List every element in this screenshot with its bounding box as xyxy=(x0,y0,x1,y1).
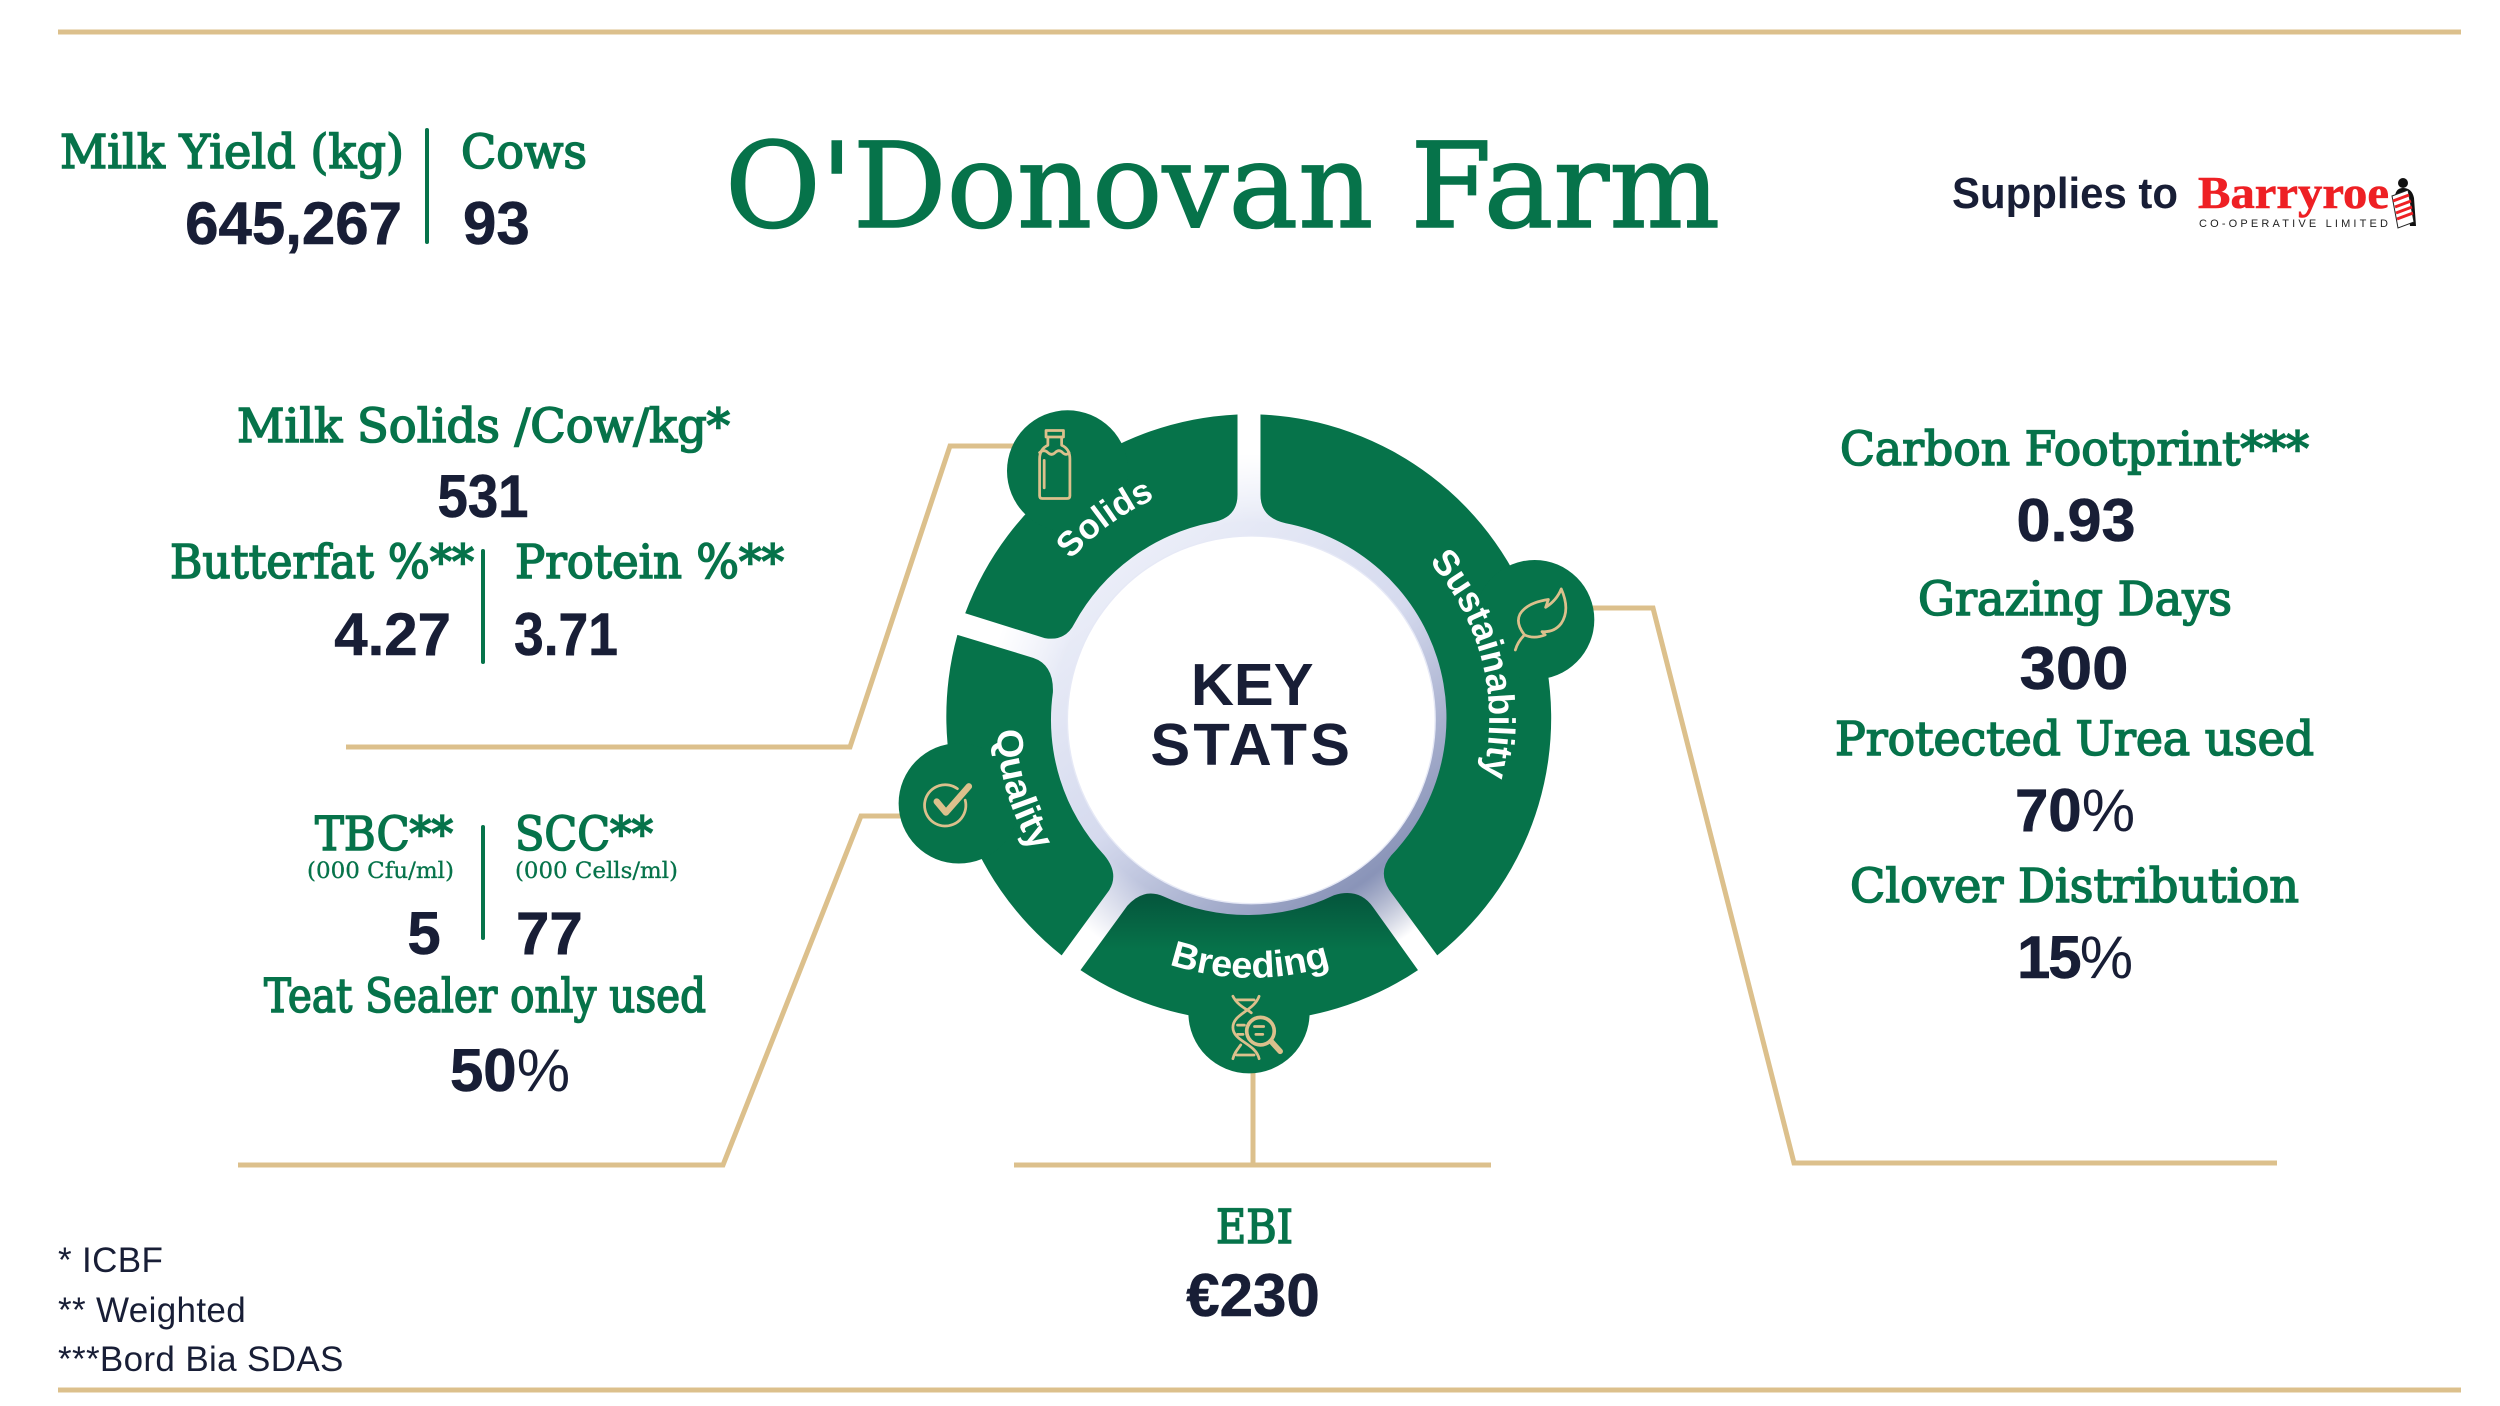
footnotes: ** Weighted xyxy=(58,1291,246,1330)
supplies to Barryroe logo: Supplies to xyxy=(1952,169,2178,218)
panel: quality stats: (000 Cells/ml) xyxy=(515,859,678,884)
supplies to Barryroe logo: CO-OPERATIVE LIMITED xyxy=(2199,218,2388,230)
center disc xyxy=(1067,535,1436,904)
panel: sustainability stats: Clover Distribution xyxy=(1850,859,2299,914)
icon: dna with magnifier xyxy=(1233,996,1280,1059)
header stats: milk yield and cows: Milk Yield (kg) xyxy=(60,125,404,180)
panel: solids stats: 531 xyxy=(438,463,528,530)
panel: solids stats: 4.27 xyxy=(334,601,451,668)
panel: solids stats: Milk Solids /Cow/kg* xyxy=(237,399,730,454)
segment: quality: Quality xyxy=(991,730,1050,846)
panel: sustainability stats: 300 xyxy=(2020,635,2128,702)
segment: quality xyxy=(898,634,1114,956)
panel: solids stats: Protein %** xyxy=(515,535,784,590)
connector: breeding xyxy=(1014,1060,1491,1165)
panel: quality stats xyxy=(264,807,706,1104)
panel: breeding stats: EBI xyxy=(1216,1200,1293,1255)
icon: check mark xyxy=(925,785,969,826)
segment: sustainability xyxy=(1260,414,1594,956)
key stats ring diagram xyxy=(898,410,1594,1074)
panel: quality stats: 77 xyxy=(516,900,583,967)
header stats: milk yield and cows xyxy=(60,125,587,257)
title: O'Donovan Farm xyxy=(725,117,1720,255)
connector: quality xyxy=(238,816,925,1165)
panel: sustainability stats: 0.93 xyxy=(2016,487,2136,554)
key stats centre circle xyxy=(1068,537,1435,903)
segment: solids xyxy=(965,410,1238,639)
panel: sustainability stats: Grazing Days xyxy=(1918,572,2232,627)
footnotes: * ICBF xyxy=(58,1241,163,1280)
panel: sustainability stats: 70% xyxy=(2015,777,2135,844)
header stats: milk yield and cows: 93 xyxy=(463,190,530,257)
panel: breeding stats xyxy=(1186,1200,1320,1329)
panel: solids stats: 3.71 xyxy=(514,601,618,668)
key stats centre circle: KEY xyxy=(1191,651,1314,718)
supplies to Barryroe logo: Barryroe xyxy=(2198,167,2389,218)
panel: sustainability stats: 15% xyxy=(2017,924,2132,991)
segment: breeding xyxy=(1080,893,1418,1074)
icon: milk bottle xyxy=(1040,431,1070,498)
panel: quality stats: (000 Cfu/ml) xyxy=(307,859,454,884)
panel: quality stats: SCC** xyxy=(515,807,653,862)
panel: sustainability stats: Protected Urea used xyxy=(1835,712,2314,767)
icon: leaf xyxy=(1515,589,1566,650)
footnotes: ***Bord Bia SDAS xyxy=(58,1340,344,1379)
panel: solids stats: Butterfat %** xyxy=(170,535,474,590)
panel: quality stats: Teat Sealer only used xyxy=(264,969,706,1024)
supplies to Barryroe logo xyxy=(1952,167,2416,230)
panel: sustainability stats xyxy=(1835,422,2314,991)
panel: quality stats: TBC** xyxy=(315,807,453,862)
panel: solids stats xyxy=(170,399,784,668)
header stats: milk yield and cows: 645,267 xyxy=(185,190,402,257)
key stats centre circle: STATS xyxy=(1150,711,1353,778)
segment: breeding: Breeding xyxy=(1172,941,1328,978)
connector: sustainability xyxy=(1590,608,2277,1163)
connector: solids xyxy=(346,446,1030,747)
header stats: milk yield and cows: Cows xyxy=(461,125,587,180)
segment: sustainability: Sustainability xyxy=(1433,550,1516,780)
panel: quality stats: 5 xyxy=(407,900,441,967)
footnotes xyxy=(58,1241,344,1379)
panel: quality stats: 50% xyxy=(450,1037,570,1104)
panel: sustainability stats: Carbon Footprint*** xyxy=(1840,422,2309,477)
segment: solids: Solids xyxy=(1058,484,1152,556)
panel: breeding stats: €230 xyxy=(1186,1262,1320,1329)
